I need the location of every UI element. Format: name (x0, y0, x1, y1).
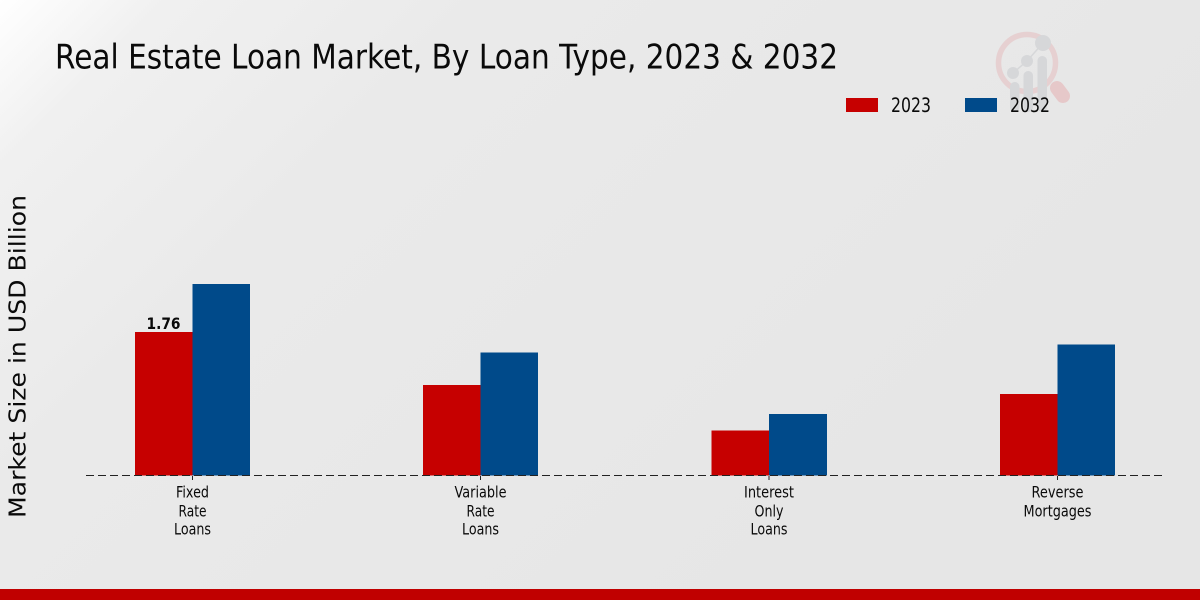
category label: Variable Rate Loans (454, 482, 506, 538)
category label: Reverse Mortgages (1024, 482, 1092, 520)
bars: Fixed Rate Loans (135, 284, 250, 476)
baseline axis (86, 474, 1164, 476)
category label: Fixed Rate Loans: Rate (178, 502, 206, 520)
category label: Variable Rate Loans: Rate (466, 502, 494, 520)
bars: Reverse Mortgages (1000, 344, 1115, 476)
legend (846, 94, 1050, 117)
category label: Fixed Rate Loans: Loans (174, 520, 211, 538)
legend item: 2023: 2023 (891, 94, 931, 117)
bars: Interest Only Loans (712, 414, 827, 476)
watermark logo icon (998, 34, 1063, 112)
legend item: 2023 (846, 94, 931, 117)
category label: Fixed Rate Loans (174, 482, 211, 538)
category label: Interest Only Loans (744, 482, 794, 538)
data label: 1.76: 1.76 (146, 314, 180, 333)
category label: Interest Only Loans: Interest (744, 482, 794, 502)
footer bar (0, 589, 1200, 600)
bars: Variable Rate Loans (423, 352, 538, 476)
category label: Reverse Mortgages: Reverse (1032, 482, 1084, 502)
legend item: 2032 (965, 94, 1050, 117)
legend item: 2032: 2032 (1010, 94, 1050, 117)
category label: Interest Only Loans: Only (754, 502, 784, 520)
category label: Interest Only Loans: Loans (750, 520, 788, 538)
category label: Fixed Rate Loans: Fixed (176, 482, 209, 502)
category label: Variable Rate Loans: Variable (454, 482, 506, 502)
category label: Variable Rate Loans: Loans (462, 520, 499, 538)
title: Real Estate Loan Market, By Loan Type, 2023 & 2032 (55, 38, 838, 78)
category label: Reverse Mortgages: Mortgages (1024, 502, 1092, 520)
y axis title: Market Size in USD Billion (6, 195, 32, 518)
bar chart (86, 284, 1164, 538)
